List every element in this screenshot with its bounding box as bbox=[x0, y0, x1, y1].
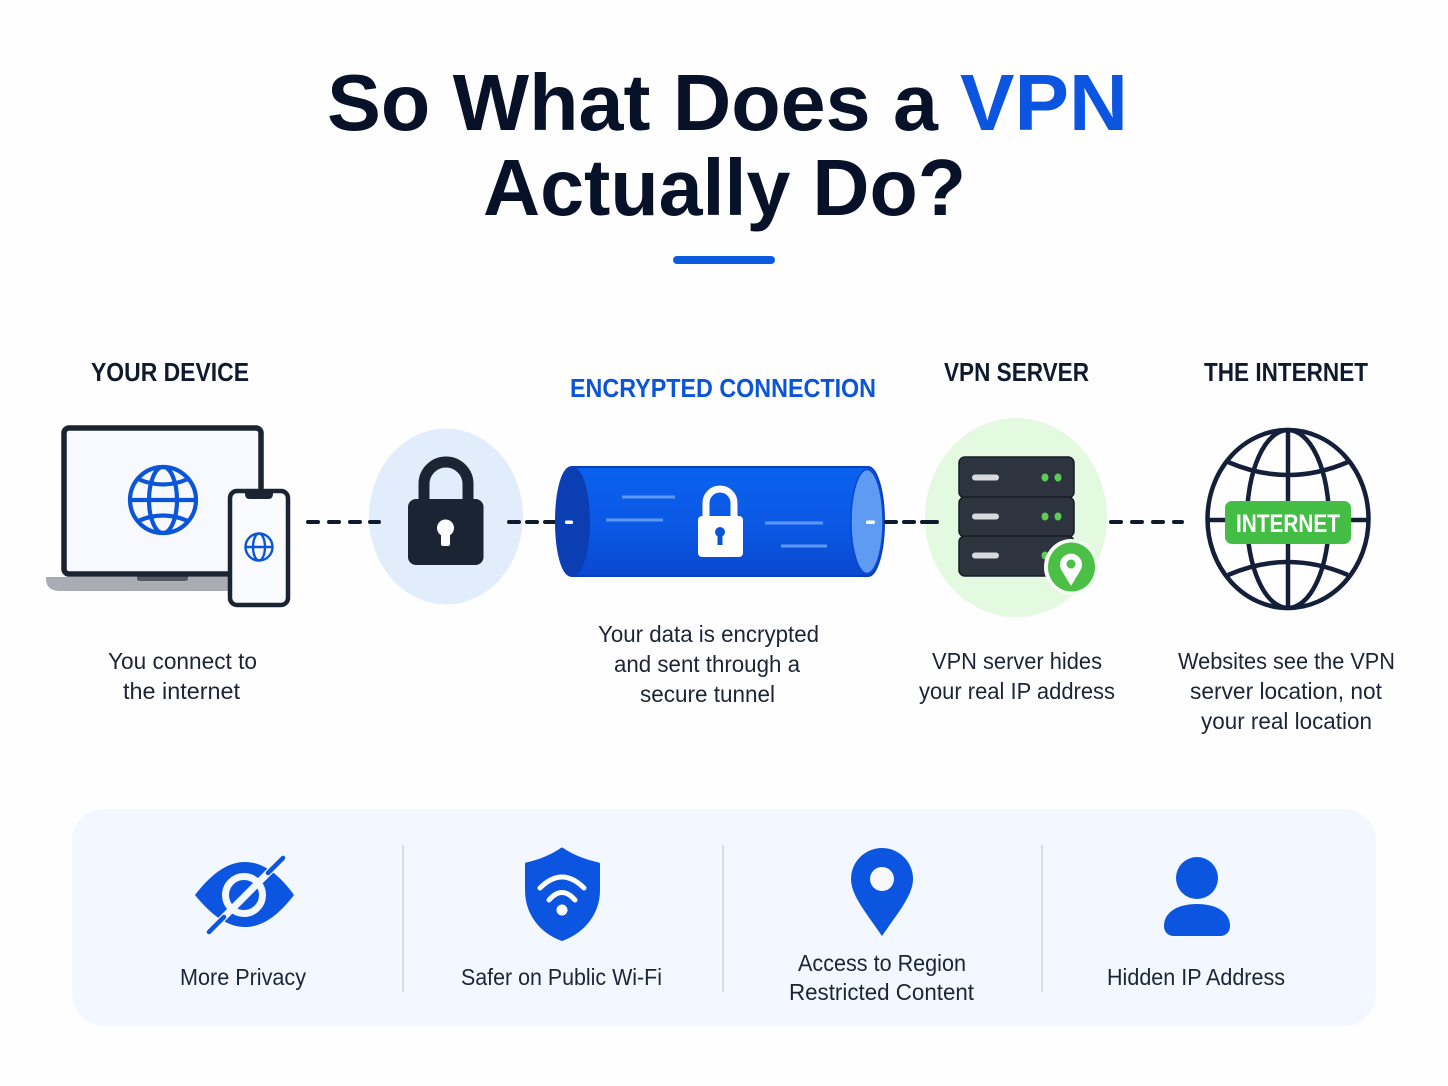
benefit: access to region restricted content: Restricted Content bbox=[789, 979, 975, 1005]
icon: globe with internet label bbox=[1208, 430, 1368, 608]
text: encrypted tunnel: secure tunnel bbox=[640, 681, 775, 707]
text: encrypted tunnel bbox=[598, 621, 819, 707]
benefit: safer on public wi-fi: Safer on Public Wi-Fi bbox=[461, 964, 662, 990]
title underline bbox=[673, 256, 775, 264]
connector: device to lock bbox=[308, 520, 379, 524]
text: encrypted tunnel: Your data is encrypted bbox=[598, 621, 819, 647]
benefit: access to region restricted content: Access to Region bbox=[798, 950, 966, 976]
text: your device: You connect to bbox=[108, 648, 257, 674]
text: your device bbox=[108, 648, 257, 704]
panel: benefits bbox=[72, 809, 1376, 1026]
title: Actually Do? bbox=[483, 143, 966, 232]
text: the internet: server location, not bbox=[1190, 678, 1383, 704]
text: encrypted tunnel: and sent through a bbox=[614, 651, 800, 677]
icon: encrypted tunnel bbox=[556, 467, 884, 576]
benefit: access to region restricted content bbox=[789, 848, 975, 1005]
text: vpn server bbox=[919, 648, 1115, 704]
connector: tunnel to server bbox=[886, 520, 926, 524]
text: your device: the internet bbox=[123, 678, 241, 704]
text: the internet: Websites see the VPN bbox=[1178, 648, 1395, 674]
heading: the internet: THE INTERNET bbox=[1204, 357, 1368, 387]
title bbox=[327, 58, 1128, 232]
heading: vpn server: VPN SERVER bbox=[944, 357, 1089, 387]
title: So What Does a bbox=[327, 58, 939, 147]
icon: padlock in blue circle bbox=[369, 428, 523, 604]
benefit: safer on public wi-fi bbox=[461, 849, 662, 990]
connector: lock to tunnel bbox=[509, 520, 556, 524]
icon: laptop and phone bbox=[46, 428, 288, 605]
text: vpn server: VPN server hides bbox=[932, 648, 1102, 674]
connector: server to internet bbox=[1111, 520, 1182, 524]
text: vpn server: your real IP address bbox=[919, 678, 1115, 704]
benefit: more privacy bbox=[180, 857, 306, 990]
benefit: hidden ip address: Hidden IP Address bbox=[1107, 964, 1285, 990]
benefit: hidden ip address bbox=[1107, 857, 1285, 990]
title: VPN bbox=[960, 58, 1128, 147]
icon: server with location badge bbox=[925, 418, 1107, 617]
text: the internet: your real location bbox=[1201, 708, 1372, 734]
heading: your device: YOUR DEVICE bbox=[91, 357, 249, 387]
heading: encrypted connection: ENCRYPTED CONNECTION bbox=[570, 373, 876, 403]
text: the internet bbox=[1178, 648, 1395, 734]
benefit: more privacy: More Privacy bbox=[180, 964, 306, 990]
icon: globe with internet label: INTERNET bbox=[1236, 510, 1340, 538]
